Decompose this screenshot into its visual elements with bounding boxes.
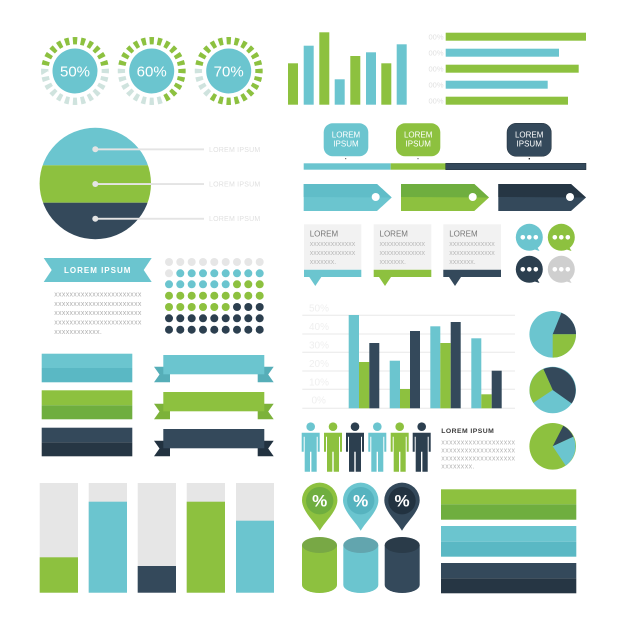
- panel: arrow tags: [304, 184, 586, 211]
- chart: horizontal bars: 00%: [428, 64, 444, 74]
- panel: timeline with callouts: [304, 123, 586, 170]
- panel: map pins: [302, 483, 420, 531]
- card navy: xxxxxxxxxxxxx: [449, 241, 495, 248]
- bubble teal: [516, 224, 543, 251]
- panel: people pictograms: [302, 422, 431, 472]
- bubble grey: [548, 256, 575, 283]
- text block: people caption: xxxxxxxxxxxxxxxxxxx: [441, 448, 515, 454]
- panel: striped circle with labels: LOREM IPSUM: [209, 147, 260, 154]
- card green: LOREM: [380, 230, 408, 239]
- card green: [374, 224, 431, 286]
- text block: placeholder paragraph: xxxxxxxxxxxxxxxxxxxxxxx: [54, 292, 142, 298]
- panel: right stacked bars: [441, 489, 576, 593]
- text block: placeholder paragraph: xxxxxxxxxxxxxxxxxxxxxxx: [54, 310, 142, 317]
- tag navy: [498, 184, 586, 211]
- callout navy: [507, 123, 551, 159]
- ribbon navy: [154, 429, 274, 456]
- ribbon teal: [154, 355, 274, 382]
- person teal: [302, 422, 320, 472]
- callout green: LOREM: [404, 130, 433, 140]
- card green: xxxxxxxxxxxxx: [380, 241, 426, 248]
- text block: people caption: xxxxxxxxxxxxxxxxxxx: [441, 456, 515, 462]
- card green: xxxxxxxxxxxxx: [380, 250, 426, 257]
- tag teal: [304, 184, 392, 211]
- cylinder teal: [343, 537, 378, 593]
- bar teal: [441, 526, 576, 557]
- chart: horizontal bars: 00%: [428, 80, 444, 90]
- chart: vertical bars top: [288, 32, 407, 105]
- text block: people caption: [441, 428, 515, 470]
- ring 60%: 60%: [137, 63, 167, 80]
- ring 50%: [39, 35, 111, 107]
- cylinder navy: [385, 537, 420, 593]
- ring 70%: 70%: [214, 63, 244, 80]
- callout green: IPSUM: [406, 140, 431, 148]
- card navy: LOREM: [449, 230, 478, 239]
- chart: grouped bars with percent axis: 10%: [309, 377, 329, 388]
- pin teal: %: [353, 492, 368, 510]
- pie 1: [529, 311, 576, 358]
- pie 3: [529, 423, 576, 470]
- panel: pie charts: [529, 311, 576, 470]
- card green: xxxxxxx.: [380, 259, 406, 266]
- text block: placeholder paragraph: [54, 292, 142, 336]
- person green: [324, 422, 342, 472]
- chart: grouped bars with percent axis: 0%: [312, 396, 326, 407]
- card teal: xxxxxxxxxxxxx: [310, 250, 356, 257]
- panel: striped circle with labels: [39, 127, 260, 240]
- person navy: [413, 422, 431, 472]
- infographic canvas: [40, 32, 586, 594]
- panel: left stacked bars: [42, 354, 132, 456]
- callout teal: LOREM: [332, 130, 361, 140]
- tag green: [401, 184, 489, 211]
- panel: striped circle with labels: LOREM IPSUM: [209, 182, 260, 188]
- ring 50%: 50%: [60, 63, 90, 80]
- panel: speech bubbles: [516, 224, 575, 283]
- ring 70%: [193, 35, 264, 107]
- callout green: [396, 123, 440, 159]
- chart: bottom progress columns: [40, 483, 274, 593]
- text block: placeholder paragraph: xxxxxxxxxxxxxxxxxxxxxxx: [54, 301, 142, 308]
- cylinder green: [302, 537, 337, 593]
- card teal: LOREM: [310, 230, 338, 239]
- text block: people caption: LOREM IPSUM: [441, 428, 494, 435]
- card navy: [443, 224, 501, 286]
- person green: [391, 422, 409, 472]
- callout teal: IPSUM: [333, 140, 359, 148]
- text block: placeholder paragraph: xxxxxxxxxxxx.: [54, 329, 102, 336]
- bar navy: [42, 428, 132, 456]
- callout teal: [324, 123, 368, 159]
- ribbon green: [154, 392, 274, 419]
- panel: info cards: [304, 224, 501, 286]
- bar teal: [42, 354, 132, 382]
- bubble navy: [516, 256, 543, 283]
- timeline bar: [304, 163, 586, 170]
- card teal: [304, 224, 361, 286]
- person navy: [346, 422, 364, 472]
- card teal: xxxxxxx.: [310, 259, 336, 266]
- bar green: [42, 390, 132, 419]
- text block: people caption: xxxxxxxxxxxxxxxxxxx: [441, 440, 515, 446]
- person teal: [368, 422, 386, 472]
- chart: grouped bars with percent axis: 30%: [309, 341, 329, 352]
- panel: percentage rings: [39, 35, 264, 107]
- text block: people caption: xxxxxxxx.: [441, 464, 475, 470]
- pin green: %: [312, 492, 327, 510]
- pin navy: %: [394, 492, 410, 510]
- text block: placeholder paragraph: xxxxxxxxxxxxxxxxxxxxxxx: [54, 320, 142, 326]
- callout navy: IPSUM: [517, 140, 542, 148]
- chart: grouped bars with percent axis: 50%: [309, 304, 329, 315]
- bar navy: [441, 563, 576, 593]
- chart: grouped bars with percent axis: 40%: [309, 322, 329, 333]
- panel: ribbons: [154, 355, 274, 456]
- panel: striped circle with labels: LOREM IPSUM: [209, 216, 260, 223]
- chart: dot matrix: [165, 258, 264, 334]
- chart: horizontal bars: 00%: [428, 32, 444, 42]
- bubble green: [548, 224, 575, 251]
- callout navy: LOREM: [515, 130, 544, 140]
- chart: horizontal bars: [428, 32, 586, 106]
- bar green: [441, 489, 576, 520]
- chart: grouped bars with percent axis: [302, 304, 515, 408]
- chart: horizontal bars: 00%: [428, 96, 444, 106]
- ring 60%: [116, 35, 187, 107]
- card teal: xxxxxxxxxxxxx: [310, 241, 356, 248]
- card navy: xxxxxxxxxxxxx: [449, 250, 495, 257]
- heading: ribbon banner: LOREM IPSUM: [64, 266, 131, 275]
- chart: horizontal bars: 00%: [428, 48, 444, 58]
- panel: cylinders: [302, 537, 420, 593]
- heading: ribbon banner: [44, 258, 152, 282]
- card navy: xxxxxxx.: [449, 259, 476, 266]
- pie 2: [529, 367, 576, 413]
- chart: grouped bars with percent axis: 20%: [309, 359, 329, 370]
